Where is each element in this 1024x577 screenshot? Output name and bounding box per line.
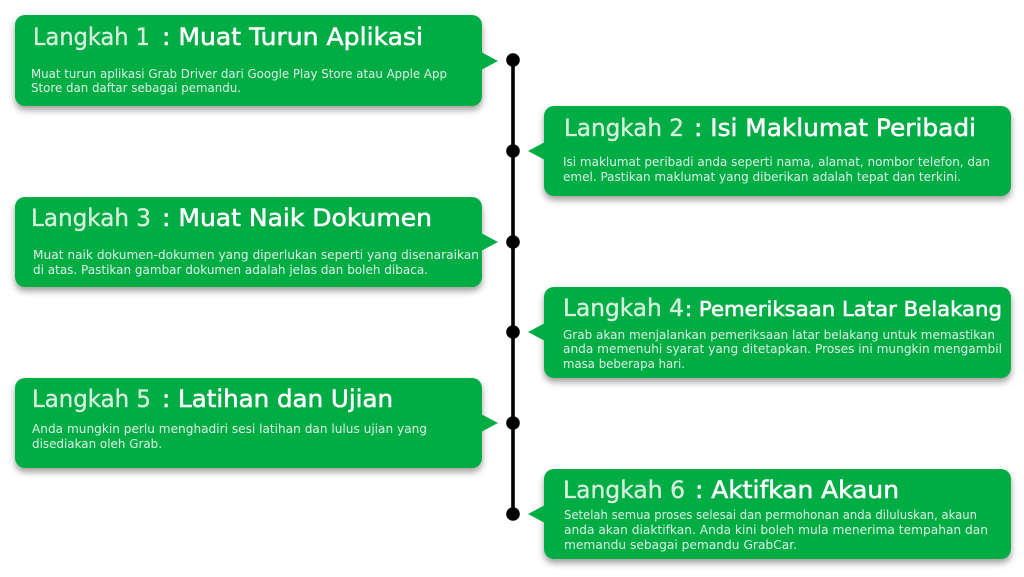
text: langkah 2 body: Isi maklumat peribadi anda seperti nama, alamat, nombor telefon, dan [563,155,990,169]
panel: langkah 1 [15,15,498,106]
heading: langkah 4: : Pemeriksaan Latar Belakang [685,297,1002,321]
heading: langkah 3: Langkah 3 [31,204,151,232]
heading: langkah 3 [31,204,432,232]
heading: langkah 4: Langkah 4 [563,294,684,322]
heading: langkah 2: Langkah 2 [564,114,684,142]
heading: langkah 3: : Muat Naik Dokumen [162,204,432,232]
text: langkah 5 body: Anda mungkin perlu menghadiri sesi latihan dan lulus ujian yang [32,422,427,436]
text: langkah 4 body [563,328,1002,371]
heading: langkah 4 [563,294,1002,322]
text: langkah 4 body: Grab akan menjalankan pemeriksaan latar belakang untuk memastikan [563,328,995,342]
timeline [506,53,520,521]
text: langkah 6 body: anda akan diaktifkan. Anda kini boleh mula menerima tempahan dan [564,523,988,537]
text: langkah 1 body: Muat turun aplikasi Grab Driver dari Google Play Store atau Apple App [31,67,447,81]
heading: langkah 1: : Muat Turun Aplikasi [162,23,423,51]
heading: langkah 6 [563,476,899,504]
text: langkah 1 body: Store dan daftar sebagai pemandu. [31,81,241,95]
text: langkah 2 body: emel. Pastikan maklumat yang diberikan adalah tepat dan terkini. [563,170,961,184]
heading: langkah 2: : Isi Maklumat Peribadi [694,114,976,142]
heading: langkah 6: : Aktifkan Akaun [695,476,899,504]
text: langkah 6 body: Setelah semua proses selesai dan permohonan anda diluluskan, akaun [564,508,977,522]
heading: langkah 1 [33,23,423,51]
text: langkah 6 body: memandu sebagai pemandu GrabCar. [564,538,797,552]
text: langkah 1 body [31,67,447,95]
heading: langkah 5: Langkah 5 [32,385,151,413]
panel: langkah 5 [15,378,498,468]
text: langkah 3 body [33,248,479,277]
text: langkah 3 body: di atas. Pastikan gambar dokumen adalah jelas dan boleh dibaca. [33,263,428,277]
text: langkah 4 body: masa beberapa hari. [563,357,685,371]
panel: langkah 6 [528,469,1011,559]
panel: langkah 4 [528,287,1011,378]
text: langkah 3 body: Muat naik dokumen-dokumen yang diperlukan seperti yang disenaraikan [33,248,479,262]
panel: langkah 3 [15,197,498,287]
text: langkah 5 body [32,422,427,451]
heading: langkah 1: Langkah 1 [33,23,150,51]
text: langkah 6 body [564,508,988,552]
panel: langkah 2 [528,106,1011,196]
heading: langkah 5 [32,385,393,413]
heading: langkah 6: Langkah 6 [563,476,685,504]
heading: langkah 2 [564,114,976,142]
text: langkah 5 body: disediakan oleh Grab. [32,437,162,451]
text: langkah 2 body [563,155,990,184]
heading: langkah 5: : Latihan dan Ujian [162,385,393,413]
text: langkah 4 body: anda memenuhi syarat yang ditetapkan. Proses ini mungkin mengambil [563,342,1002,356]
